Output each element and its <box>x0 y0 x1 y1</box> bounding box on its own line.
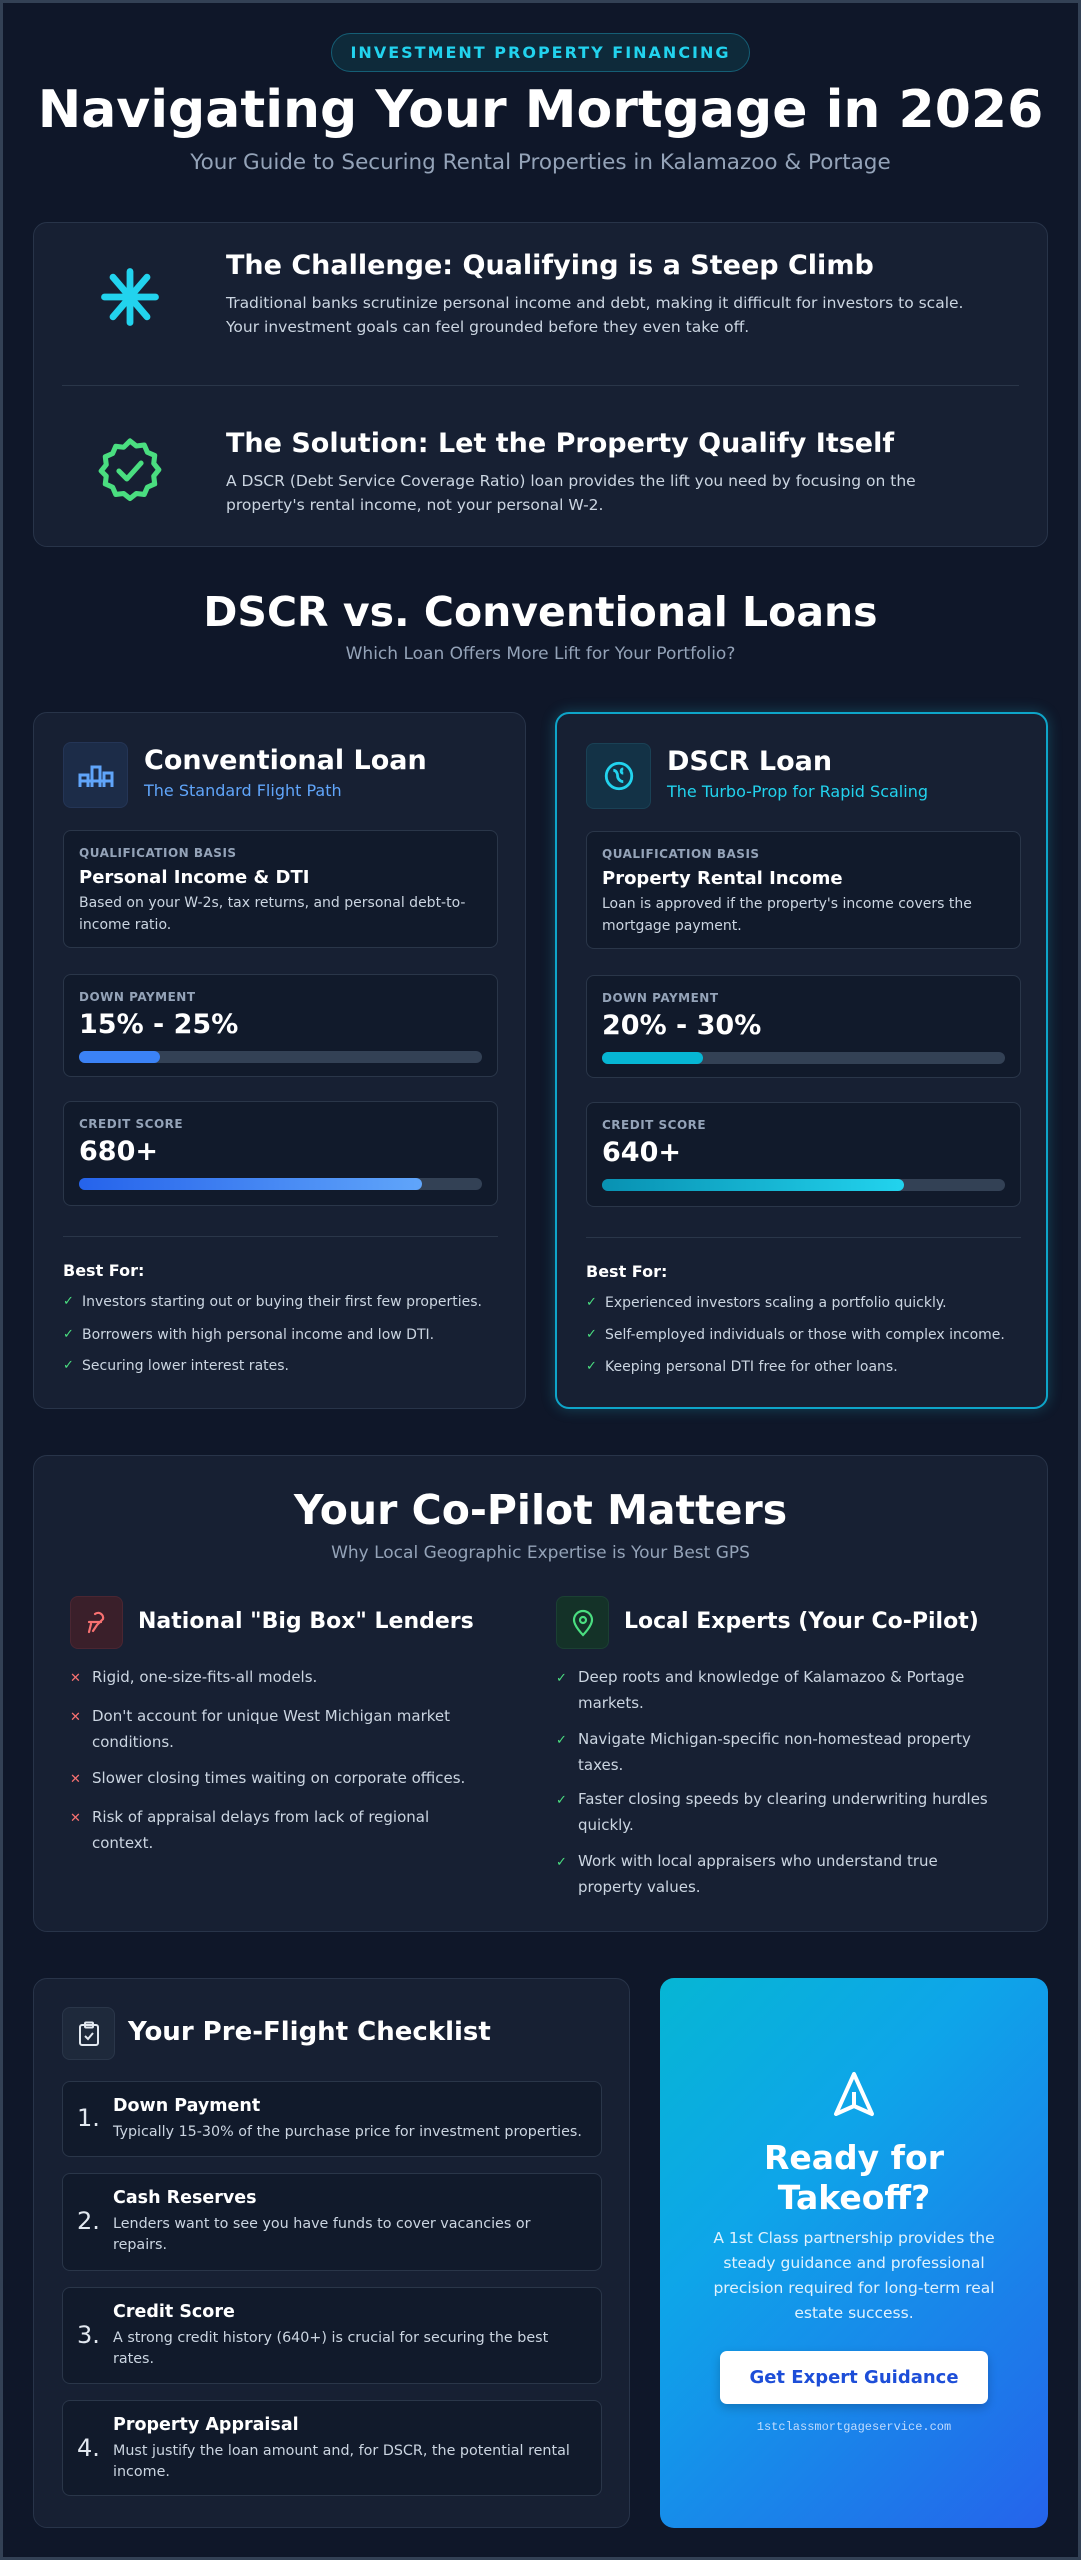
column: local experts: Work with local appraisers who understand true property values. <box>578 1852 938 1896</box>
box: credit score: 680+ <box>79 1136 158 1167</box>
box: down payment: DOWN PAYMENT <box>602 991 719 1005</box>
subtitle: The Standard Flight Path <box>144 781 342 800</box>
column: national lenders: ✕ <box>70 1671 81 1686</box>
box: credit score <box>586 1102 1021 1207</box>
subtitle: The Turbo-Prop for Rapid Scaling <box>667 782 928 801</box>
heading: solution: The Solution: Let the Property Qualify Itself <box>226 428 894 459</box>
heading: Ready for <box>764 2138 944 2177</box>
url: 1stclassmortgageservice.com <box>757 2420 951 2434</box>
subheading: Which Loan Offers More Lift for Your Portfolio? <box>346 644 735 664</box>
column: local experts: ✓ <box>556 1671 567 1686</box>
item 4: Property Appraisal <box>113 2415 299 2435</box>
column: local experts: Deep roots and knowledge of Kalamazoo & Portage markets. <box>578 1668 964 1712</box>
title: Navigating Your Mortgage in 2026 <box>38 80 1043 140</box>
item 4 <box>62 2400 602 2496</box>
heading <box>764 2138 944 2217</box>
text: A 1st Class partnership provides the steady guidance and professional precision required for long-term real estate success. <box>713 2229 995 2322</box>
box: qualification <box>586 831 1021 949</box>
column: local experts: Navigate Michigan-specific non-homestead property taxes. <box>578 1730 971 1774</box>
item 1: Down Payment <box>113 2096 260 2116</box>
heading: Your Co-Pilot Matters <box>294 1486 787 1534</box>
panel: challenge & solution <box>33 222 1048 547</box>
panel: DSCR loan <box>555 712 1048 1409</box>
box: down payment: DOWN PAYMENT <box>79 990 196 1004</box>
panel: call to action <box>660 1978 1048 2528</box>
icon: map pin <box>556 1596 609 1649</box>
text: solution: A DSCR (Debt Service Coverage Ratio) loan provides the lift you need by focusing on the property's rental income, not your personal W-2. <box>226 472 916 514</box>
icon: badge check <box>98 438 162 502</box>
panel: co-pilot <box>33 1455 1048 1932</box>
box: qualification <box>63 830 498 948</box>
best for list: Borrowers with high personal income and low DTI. <box>82 1327 434 1343</box>
heading: Your Pre-Flight Checklist <box>128 2017 491 2047</box>
best for list: Securing lower interest rates. <box>82 1358 289 1374</box>
box: down payment <box>586 975 1021 1078</box>
best for list: ✓ <box>63 1294 74 1309</box>
button: Get Expert Guidance <box>749 2367 959 2388</box>
badge <box>331 33 750 72</box>
box: qualification: Loan is approved if the property's income covers the mortgage payment. <box>602 896 972 934</box>
item 3: A strong credit history (640+) is crucial for securing the best rates. <box>113 2330 548 2367</box>
column: local experts: ✓ <box>556 1855 567 1870</box>
box: qualification: Property Rental Income <box>602 868 843 889</box>
heading: Takeoff? <box>778 2178 930 2217</box>
item 1 <box>62 2081 602 2157</box>
item 2 <box>62 2173 602 2271</box>
icon: broken link <box>70 1596 123 1649</box>
icon: paper plane <box>834 2072 874 2116</box>
best for list: ✓ <box>63 1358 74 1373</box>
item 2: Lenders want to see you have funds to cover vacancies or repairs. <box>113 2216 530 2253</box>
best for list: Experienced investors scaling a portfolio quickly. <box>605 1295 947 1311</box>
icon: dscr <box>586 743 651 809</box>
badge: INVESTMENT PROPERTY FINANCING <box>350 43 731 62</box>
box: credit score: CREDIT SCORE <box>79 1117 183 1131</box>
best for list: Best For: <box>586 1262 667 1281</box>
box: qualification: QUALIFICATION BASIS <box>602 847 760 861</box>
heading: Local Experts (Your Co-Pilot) <box>624 1609 979 1634</box>
heading: DSCR Loan <box>667 746 832 777</box>
subtitle: Your Guide to Securing Rental Properties in Kalamazoo & Portage <box>190 150 891 175</box>
item 4: Must justify the loan amount and, for DSCR, the potential rental income. <box>113 2443 570 2480</box>
column: local experts <box>556 1596 988 1896</box>
icon: clipboard <box>62 2007 115 2060</box>
best for list: Self-employed individuals or those with complex income. <box>605 1327 1005 1343</box>
heading: DSCR vs conventional: DSCR vs. Conventional Loans <box>203 588 878 636</box>
best for list <box>586 1262 1005 1375</box>
heading: challenge: The Challenge: Qualifying is a Steep Climb <box>226 250 874 281</box>
column: national lenders: Risk of appraisal delays from lack of regional context. <box>92 1808 429 1852</box>
item 2: Cash Reserves <box>113 2188 257 2208</box>
box: down payment: 15% - 25% <box>79 1009 238 1040</box>
button <box>720 2351 988 2404</box>
heading: National "Big Box" Lenders <box>138 1609 474 1634</box>
column: local experts: Faster closing speeds by clearing underwriting hurdles quickly. <box>578 1790 988 1834</box>
best for list: ✓ <box>586 1327 597 1342</box>
best for list: ✓ <box>63 1327 74 1342</box>
item 3: Credit Score <box>113 2302 235 2322</box>
best for list: Best For: <box>63 1261 144 1280</box>
box: qualification: Personal Income & DTI <box>79 867 309 888</box>
text: challenge: Traditional banks scrutinize personal income and debt, making it difficult for investors to scale. Your investment goals can feel grounded before they even take off. <box>226 294 963 336</box>
panel: pre-flight checklist <box>33 1978 630 2528</box>
column: national lenders: ✕ <box>70 1710 81 1725</box>
item 1: 1. <box>77 2104 100 2132</box>
best for list: Investors starting out or buying their first few properties. <box>82 1294 482 1310</box>
box: credit score <box>63 1101 498 1206</box>
item 3: 3. <box>77 2321 100 2349</box>
item 1: Typically 15-30% of the purchase price for investment properties. <box>113 2124 582 2140</box>
column: national lenders: Rigid, one-size-fits-all models. <box>92 1668 317 1686</box>
best for list: ✓ <box>586 1359 597 1374</box>
icon: conventional <box>63 742 128 808</box>
box: credit score: CREDIT SCORE <box>602 1118 706 1132</box>
item 4: 4. <box>77 2434 100 2462</box>
box: qualification: Based on your W-2s, tax returns, and personal debt-to-income ratio. <box>79 895 465 933</box>
best for list: ✓ <box>586 1295 597 1310</box>
item 3 <box>62 2287 602 2384</box>
column: local experts: ✓ <box>556 1733 567 1748</box>
item 2: 2. <box>77 2207 100 2235</box>
box: credit score: 640+ <box>602 1137 681 1168</box>
icon: asterisk <box>101 268 159 326</box>
column: national lenders: Don't account for unique West Michigan market conditions. <box>92 1707 450 1751</box>
panel: conventional loan <box>33 712 526 1409</box>
box: down payment <box>63 974 498 1077</box>
column: national lenders <box>70 1596 474 1852</box>
column: national lenders: ✕ <box>70 1811 81 1826</box>
subheading: Why Local Geographic Expertise is Your Best GPS <box>331 1543 750 1563</box>
box: qualification: QUALIFICATION BASIS <box>79 846 237 860</box>
column: national lenders: Slower closing times waiting on corporate offices. <box>92 1769 465 1787</box>
best for list: Keeping personal DTI free for other loans. <box>605 1359 898 1375</box>
box: down payment: 20% - 30% <box>602 1010 761 1041</box>
heading: Conventional Loan <box>144 745 427 776</box>
column: national lenders: ✕ <box>70 1772 81 1787</box>
best for list <box>63 1261 482 1374</box>
column: local experts: ✓ <box>556 1793 567 1808</box>
